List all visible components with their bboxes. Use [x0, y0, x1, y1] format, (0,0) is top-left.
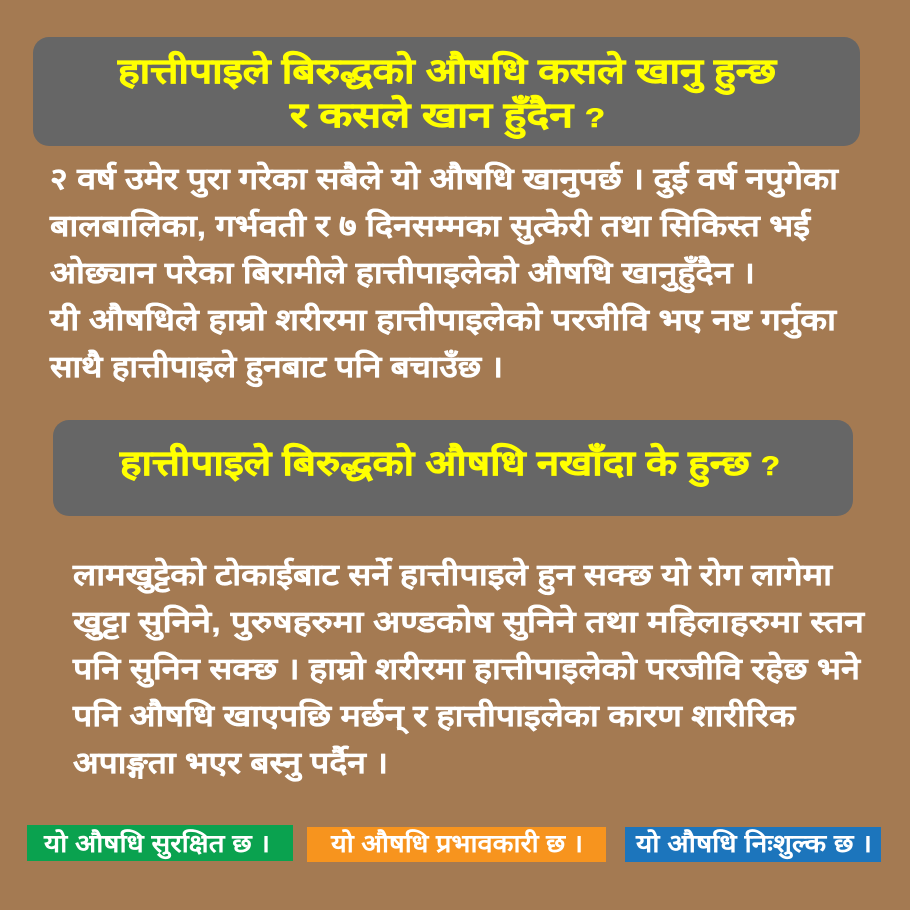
text block: what happens without the medicine: पनि औषधि खाएपछि मर्छन् र हात्तीपाइलेका कारण शारीरिक [72, 698, 796, 735]
text block: what happens without the medicine: लामखुट्टेको टोकाईबाट सर्ने हात्तीपाइले हुन सक्छ यो रोग लागेमा [72, 557, 833, 596]
text block: what happens without the medicine [72, 557, 866, 782]
text block: what happens without the medicine: अपाङ्गता भएर बस्नु पर्दैन । [73, 745, 388, 782]
badge: free: यो औषधि निःशुल्क छ । [635, 829, 872, 860]
badge: free [625, 827, 881, 862]
panel: second heading: हात्तीपाइले बिरुद्धको औषधि नखाँदा के हुन्छ ? [119, 443, 780, 487]
badge: effective: यो औषधि प्रभावकारी छ । [330, 829, 583, 858]
text block: who should take the medicine: बालबालिका, गर्भवती र ७ दिनसम्मका सुत्केरी तथा सिकिस्त भई [49, 208, 811, 245]
badge: safe [27, 825, 293, 861]
text block: what happens without the medicine: खुट्टा सुनिने, पुरुषहरुमा अण्डकोष सुनिने तथा महिलाहरुमा स्तन [72, 604, 866, 641]
text block: who should take the medicine: साथै हात्तीपाइले हुनबाट पनि बचाउँछ । [49, 349, 503, 388]
panel: first heading: हात्तीपाइले बिरुद्धको औषधि कसले खानु हुन्छ [117, 51, 778, 95]
badge: safe: यो औषधि सुरक्षित छ । [43, 829, 270, 860]
text block: who should take the medicine: ओछ्यान परेका बिरामीले हात्तीपाइलेको औषधि खानुहुँदैन । [50, 255, 755, 294]
panel: first heading: र कसले खान हुँदैन ? [289, 95, 605, 139]
badge: effective [307, 827, 606, 862]
text block: who should take the medicine: २ वर्ष उमेर पुरा गरेका सबैले यो औषधि खानुपर्छ । दुई वर्ष नपुगेका [50, 161, 839, 199]
panel: first heading [33, 37, 860, 146]
text block: who should take the medicine: यी औषधिले हाम्रो शरीरमा हात्तीपाइलेको परजीवि भए नष्ट गर्नुका [49, 302, 837, 339]
text block: who should take the medicine [49, 161, 839, 388]
text block: what happens without the medicine: पनि सुनिन सक्छ । हाम्रो शरीरमा हात्तीपाइलेको परजीवि रहेछ भने [72, 651, 862, 688]
panel: second heading [53, 420, 853, 516]
